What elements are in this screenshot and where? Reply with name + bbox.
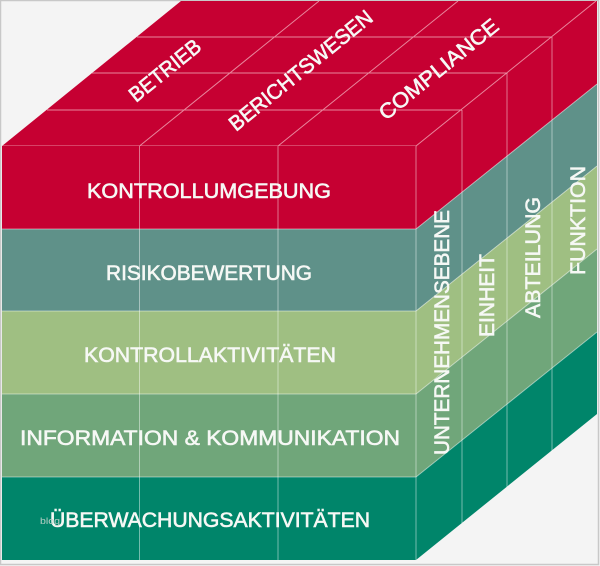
- panel: row Überwachungsaktivitäten: [2, 332, 597, 560]
- label: Compliance: COMPLIANCE: [375, 15, 503, 125]
- label: Kontrollumgebung: KONTROLLUMGEBUNG: [87, 180, 331, 203]
- label: Information & Kommunikation: INFORMATION & KOMMUNIKATION: [20, 427, 400, 450]
- label: Abteilung: ABTEILUNG: [522, 197, 545, 318]
- label: Einheit: EINHEIT: [476, 254, 499, 337]
- label: Überwachungsaktivitäten: ÜBERWACHUNGSAKTIVITÄTEN: [50, 509, 370, 532]
- label: Kontrollaktivitäten: KONTROLLAKTIVITÄTEN: [84, 344, 336, 367]
- label: Berichtswesen: BERICHTSWESEN: [225, 6, 377, 136]
- label: Unternehmensebene: UNTERNEHMENSEBENE: [431, 210, 454, 455]
- small overlay label: blog: [40, 516, 60, 526]
- label: Funktion: FUNKTION: [567, 166, 590, 275]
- panel: top face: [2, 1, 597, 229]
- label: Betrieb: BETRIEB: [125, 35, 206, 107]
- label: Risikobewertung: RISIKOBEWERTUNG: [106, 262, 312, 285]
- panel: row Kontrollumgebung: [2, 146, 416, 229]
